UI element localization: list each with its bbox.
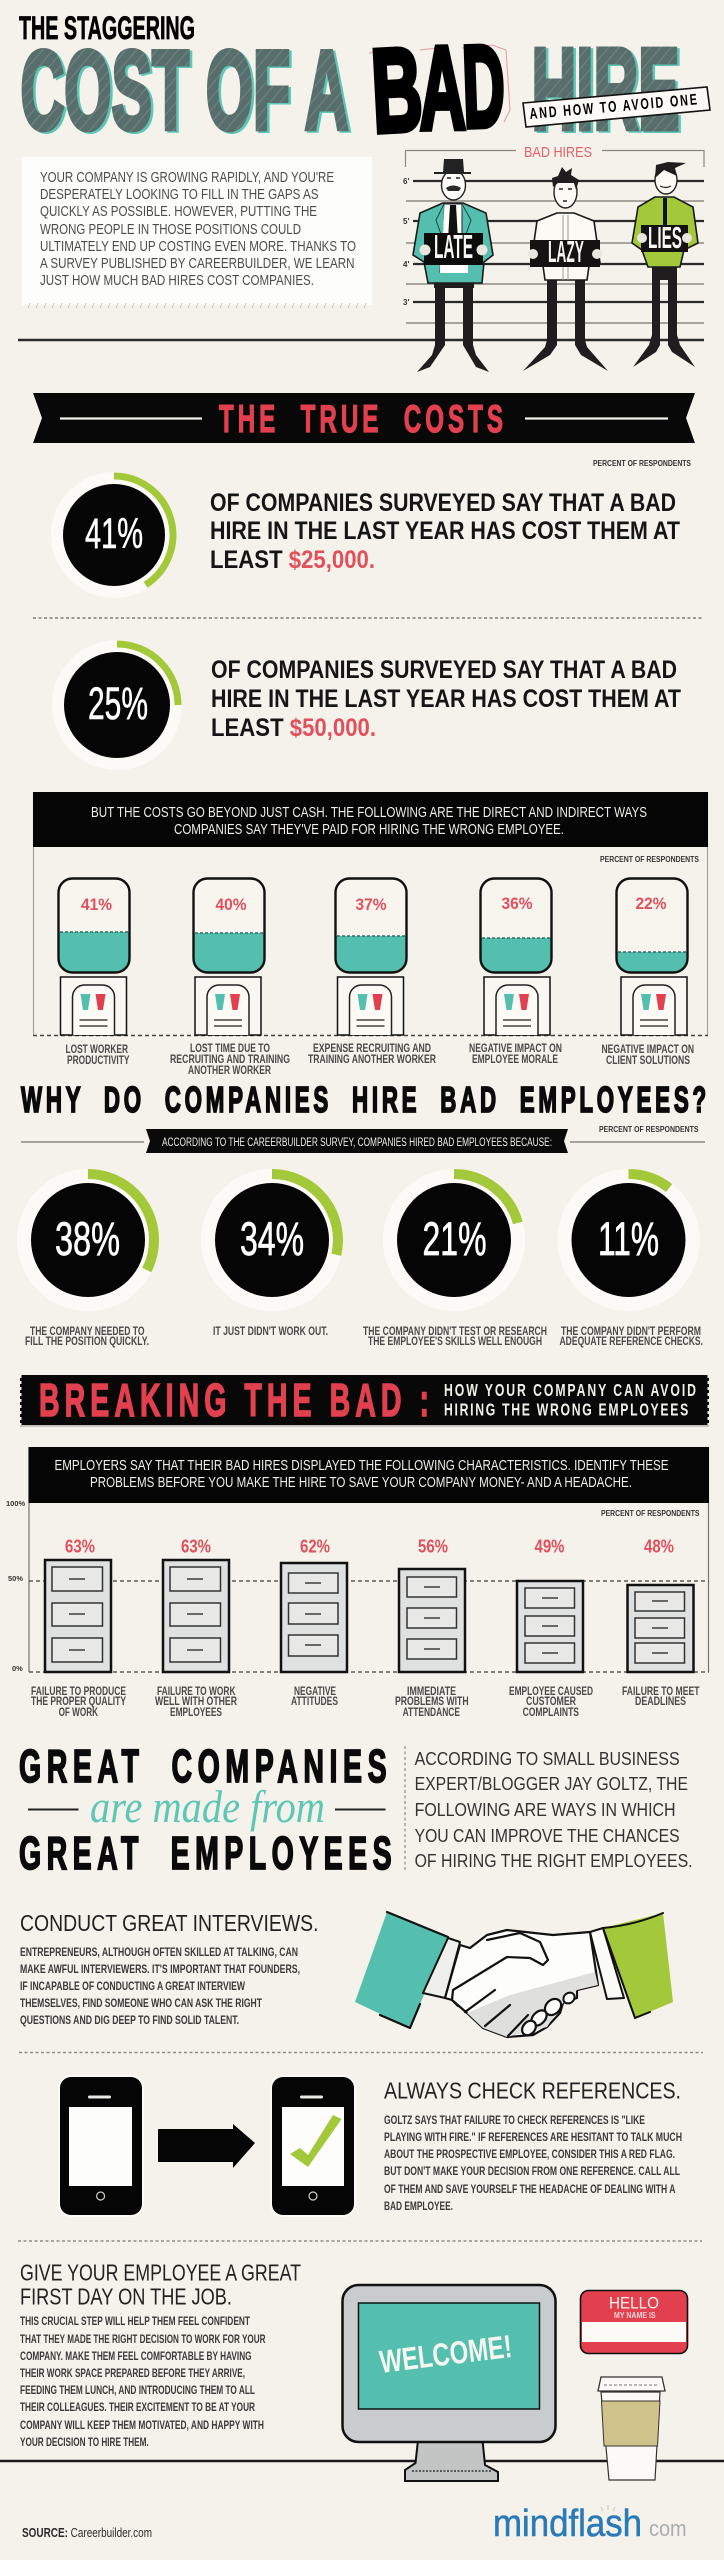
icon: phone before [58,2075,144,2217]
filing cabinet: 63 [45,1536,111,1672]
panel header: COMPANIES SAY THEY'VE PAID FOR HIRING THE WRONG EMPLOYEE. [174,822,564,838]
filing cabinet: 49 [517,1536,583,1672]
intro text: A SURVEY PUBLISHED BY CAREERBUILDER, WE LEARN [40,256,354,272]
panel: intro [22,157,372,308]
donut: 11 percent [558,1169,700,1311]
cooler labels: LOST WORKER [66,1044,128,1056]
title word BAD: D [460,21,507,152]
donut 41: 41% [85,510,143,558]
axis labels: 100% [6,1499,26,1508]
tip: conduct great interviews [20,1910,318,2027]
donut: 34 percent [201,1169,343,1311]
text: jay goltz intro: YOU CAN IMPROVE THE CHANCES [415,1825,680,1846]
cabinet labels: THE PROPER QUALITY [31,1696,126,1708]
stat: 41 percent [51,472,680,598]
icon: computer monitor [342,2285,556,2481]
cooler labels: NEGATIVE IMPACT ON [602,1044,694,1056]
tip body: YOUR DECISION TO HIRE THEM. [20,2437,149,2449]
tip body [20,1947,300,2027]
cabinet labels: ATTENDANCE [403,1707,460,1719]
tip body: THEIR COLLEAGUES. THEIR EXCITEMENT TO BE AT YOUR [20,2402,255,2414]
icon: hello name tag: MY NAME IS [614,2311,656,2320]
figure: lies: LIES [648,220,682,255]
tip body: THEIR WORK SPACE PREPARED BEFORE THEY ARRIVE, [20,2368,245,2380]
water cooler: 22 [616,878,688,1035]
legend: percent of respondents: PERCENT OF RESPONDENTS [593,459,692,468]
filing cabinet: 49: 49% [534,1536,564,1556]
intro text: YOUR COMPANY IS GROWING RAPIDLY, AND YOU'RE [40,170,334,186]
banner: breaking the bad: BREAKING THE BAD : [39,1375,429,1427]
title [19,10,710,158]
heading: great companies are made from great employees: GREAT EMPLOYEES [19,1828,392,1880]
intro text: JUST HOW MUCH BAD HIRES COST COMPANIES. [40,273,314,289]
panel: indirect costs [33,792,708,1036]
intro text: QUICKLY AS POSSIBLE. HOWEVER, PUTTING THE [40,204,317,220]
tip body: ENTREPRENEURS, ALTHOUGH OFTEN SKILLED AT TALKING, CAN [20,1947,298,1959]
tip: always check references: ALWAYS CHECK REFERENCES. [384,2078,681,2104]
title main words: COST OF A [20,28,349,153]
cabinet labels: PROBLEMS WITH [395,1696,469,1708]
donut labels: IT JUST DIDN'T WORK OUT. [213,1326,328,1338]
text: jay goltz intro: ACCORDING TO SMALL BUSINESS [415,1748,680,1769]
filing cabinet: 62 [281,1536,347,1672]
cabinet labels: EMPLOYEE CAUSED [509,1686,593,1698]
filing cabinet: 63 [163,1536,229,1672]
heading: great companies are made from great employees: are made from [90,1781,325,1832]
ribbon: according to survey [21,1129,705,1153]
donut: 11 percent: 11% [598,1212,659,1265]
statement 25: LEAST $50,000. [211,714,376,742]
figure: late [413,159,493,372]
cooler labels: EMPLOYEE MORALE [472,1054,558,1066]
banner: the true costs: THE TRUE COSTS [219,397,503,440]
text: jay goltz intro: FOLLOWING ARE WAYS IN WHICH [415,1799,676,1820]
banner: breaking the bad: HIRING THE WRONG EMPLOYEES [444,1400,688,1420]
filing cabinet: 62: 62% [300,1536,330,1556]
icon: phone with check [270,2075,356,2217]
tip: conduct great interviews: CONDUCT GREAT INTERVIEWS. [20,1910,318,1936]
heading: why do companies hire bad employees: WHY DO COMPANIES HIRE BAD EMPLOYEES? [21,1081,706,1120]
height labels [403,177,409,307]
cabinet labels: FAILURE TO PRODUCE [31,1686,126,1698]
cabinet labels: DEADLINES [635,1696,686,1708]
tag: and how to avoid one: AND HOW TO AVOID ONE [529,91,698,122]
tip body: THAT THEY MADE THE RIGHT DECISION TO WORK FOR YOUR [20,2334,266,2346]
water cooler: 41: 41% [81,895,112,914]
intro text: WRONG PEOPLE IN THOSE POSITIONS COULD [40,222,301,238]
logo: mindflash: mindflash [493,2503,642,2545]
panel header [28,1447,709,1503]
statement 41 [210,489,680,574]
donut: 21 percent [383,1169,525,1311]
tip: give your employee a great first day: GIVE YOUR EMPLOYEE A GREAT [20,2260,301,2286]
donut: 38 percent: 38% [55,1212,120,1265]
panel: characteristics [6,1447,709,1673]
height labels: 3' [403,298,409,307]
cabinet labels: EMPLOYEES [170,1707,222,1719]
icon: handshake [355,1912,673,2038]
cooler labels: LOST TIME DUE TO [190,1043,270,1055]
title main words: COST OF A [23,30,351,154]
bad hires bracket: BAD HIRES [524,144,592,161]
legend: PERCENT OF RESPONDENTS [600,855,700,864]
icon: coffee cup [598,2377,665,2480]
icon: computer monitor: WELCOME! [377,2328,514,2380]
water cooler: 36 [480,878,552,1035]
banner: breaking the bad: HOW YOUR COMPANY CAN AVOID [444,1381,696,1401]
cooler labels: RECRUITING AND TRAINING [170,1054,290,1066]
tip body [384,2115,682,2213]
cooler labels: EXPENSE RECRUITING AND [313,1043,431,1055]
source: SOURCE: Careerbuilder.com [22,2525,152,2540]
cabinet labels [31,1686,700,1719]
tip body: MAKE AWFUL INTERVIEWERS. IT'S IMPORTANT THAT FOUNDERS, [20,1964,300,1976]
cabinet labels: ATTITUDES [291,1696,338,1708]
tip body: COMPANY WILL KEEP THEM MOTIVATED, AND HAPPY WITH [20,2420,264,2432]
tip: give your employee a great first day: FIRST DAY ON THE JOB. [20,2284,232,2310]
cabinet labels: WELL WITH OTHER [155,1696,238,1708]
figure: lazy: LAZY [548,234,584,269]
cabinet labels: FAILURE TO WORK [157,1686,236,1698]
height labels: 6' [403,177,409,186]
cabinet labels: OF WORK [59,1707,98,1719]
axis labels: 0% [12,1664,23,1673]
tip body: COMPANY. MAKE THEM FEEL COMFORTABLE BY HAVING [20,2351,252,2363]
heading: great companies are made from great employees: GREAT COMPANIES [19,1741,387,1793]
cooler labels [66,1043,694,1077]
cabinet labels: COMPLAINTS [523,1707,579,1719]
tip: always check references [384,2078,682,2213]
cooler labels: ANOTHER WORKER [188,1065,272,1077]
water cooler: 40: 40% [216,895,246,914]
statement 41: LEAST $25,000. [210,546,375,574]
donut: 38 percent [17,1169,159,1311]
water cooler: 40 [194,878,264,1035]
intro text [40,170,356,289]
cabinet labels: FAILURE TO MEET [622,1686,700,1698]
figure: lazy [523,167,608,371]
arrow [158,2124,255,2168]
statement 25 [211,656,681,742]
water cooler: 37: 37% [356,895,386,914]
logo: mindflash: com [649,2516,687,2541]
panel header [33,792,708,847]
text: jay goltz intro [415,1748,693,1871]
filing cabinet: 48 [628,1536,694,1672]
filing cabinet: 56 [399,1536,465,1672]
cabinet labels: CUSTOMER [526,1696,577,1708]
title word BAD: A [418,22,466,155]
title word BAD: B [368,24,425,158]
cooler labels: CLIENT SOLUTIONS [606,1055,690,1067]
bad hires bracket [406,144,704,167]
banner: the true costs [33,393,695,443]
filing cabinet: 63: 63% [65,1536,95,1556]
icon: hello name tag: HELLO [609,2294,659,2312]
tip body [20,2316,266,2449]
water cooler: 36: 36% [502,894,532,913]
tip body: THIS CRUCIAL STEP WILL HELP THEM FEEL CONFIDENT [20,2316,250,2328]
intro text: ULTIMATELY END UP COSTING EVEN MORE. THANKS TO [40,239,356,255]
height labels: 5' [403,217,409,226]
intro text: DESPERATELY LOOKING TO FILL IN THE GAPS AS [40,187,318,203]
donut 25 [52,640,182,770]
tip body: IF INCAPABLE OF CONDUCTING A GREAT INTERVIEW [20,1981,245,1993]
water cooler: 37 [336,878,406,1035]
banner: breaking the bad [20,1375,709,1427]
tip body: FEEDING THEM LUNCH, AND INTRODUCING THEM TO ALL [20,2385,255,2397]
axis labels [6,1499,26,1673]
figure: lies [632,162,698,367]
tip: give your employee a great first day [20,2260,301,2449]
cooler labels: NEGATIVE IMPACT ON [469,1043,562,1055]
figure: late: LATE [434,228,473,265]
donut 41 [51,472,177,598]
tip body: THEMSELVES, FIND SOMEONE WHO CAN ASK THE RIGHT [20,1998,262,2010]
ribbon: according to survey: ACCORDING TO THE CAREERBUILDER SURVEY, COMPANIES HIRED BAD EMPLOYEES BECAUSE: [162,1137,552,1149]
height chart lines [18,177,704,340]
donut labels: THE COMPANY NEEDED TO [30,1326,145,1338]
cooler labels: PRODUCTIVITY [67,1055,130,1067]
legend: PERCENT OF RESPONDENTS [601,1509,700,1518]
donut labels [25,1326,703,1348]
donut labels: THE EMPLOYEE'S SKILLS WELL ENOUGH [368,1336,542,1348]
donut labels: FILL THE POSITION QUICKLY. [25,1336,149,1348]
title kicker: THE STAGGERING [19,10,195,46]
icon: hello name tag [580,2290,688,2354]
donut: 34 percent: 34% [240,1212,304,1265]
axis labels: 50% [8,1574,23,1583]
legend: PERCENT OF RESPONDENTS [599,1125,699,1134]
filing cabinet: 48: 48% [644,1536,674,1556]
filing cabinet: 56: 56% [418,1536,448,1556]
heading: great companies are made from great employees [19,1741,392,1880]
cabinet labels: NEGATIVE [294,1686,336,1698]
title word BAD [368,21,510,158]
cabinet labels: IMMEDIATE [407,1686,456,1698]
icon: check mark [290,2115,342,2167]
donut labels: THE COMPANY DIDN'T TEST OR RESEARCH [363,1326,547,1338]
donut 25: 25% [88,678,148,729]
filing cabinet: 63: 63% [181,1536,211,1556]
tip body: QUESTIONS AND DIG DEEP TO FIND SOLID TALENT. [20,2015,239,2027]
height labels: 4' [403,260,409,269]
tip body: BAD EMPLOYEE. [384,2201,453,2213]
water cooler: 22: 22% [636,894,666,913]
water cooler: 41 [58,878,130,1035]
cooler labels: TRAINING ANOTHER WORKER [308,1054,437,1066]
stat: 25 percent [52,640,681,770]
donut: 21 percent: 21% [422,1212,486,1265]
